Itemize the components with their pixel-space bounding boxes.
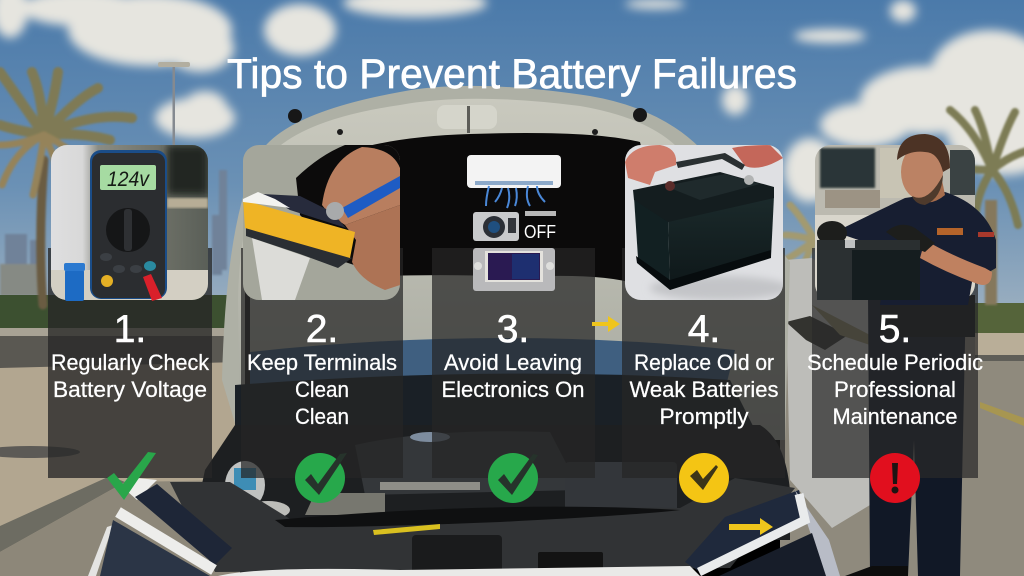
fender and mirror on the right	[785, 258, 870, 528]
dark underside of brush	[246, 226, 352, 268]
panel: step 2 backing	[241, 248, 403, 478]
image: car battery lifted by hands	[625, 145, 790, 300]
display	[100, 165, 156, 190]
gloves	[817, 221, 935, 252]
step 1 text	[51, 308, 210, 402]
blue filter canister	[64, 263, 85, 301]
step 5 text: Maintenance	[832, 404, 958, 429]
rotary dial	[106, 208, 150, 252]
step 5 text	[807, 308, 983, 429]
blue handle	[342, 176, 400, 218]
step 4 text: 4.	[688, 308, 720, 351]
image tile blurred background	[815, 145, 975, 300]
handle	[676, 153, 745, 170]
street lamp	[158, 62, 190, 148]
front bumper and cowl	[170, 478, 795, 576]
battery left face	[634, 197, 670, 287]
forearm	[920, 240, 992, 285]
step 1 text: Battery Voltage	[53, 377, 207, 402]
meter buttons	[100, 253, 156, 287]
red probe	[143, 274, 162, 301]
icon: yellow check badge for step 4	[679, 453, 729, 503]
brush top	[262, 194, 346, 228]
hand	[322, 147, 400, 225]
left headlight	[88, 478, 232, 576]
step 2 text: 2.	[306, 308, 338, 351]
step 3 text: 3.	[497, 308, 529, 351]
hands	[625, 145, 676, 185]
step 5 text: 5.	[879, 308, 911, 351]
torso	[835, 192, 996, 305]
icon group: electronics off	[467, 155, 561, 291]
icon: red warning badge for step 5	[870, 453, 920, 503]
step 2 text: Keep Terminals	[247, 350, 397, 375]
step 1 text: 1.	[114, 308, 146, 351]
step 4 text: Promptly	[660, 404, 748, 429]
ground left and right	[0, 295, 1024, 576]
camera	[473, 212, 519, 241]
battery	[817, 243, 920, 300]
step 4 text: Weak Batteries	[630, 377, 778, 402]
logo badge	[937, 228, 963, 235]
panel: step 3 backing	[432, 248, 595, 478]
step 2 text	[247, 308, 397, 429]
step 1 text: Regularly Check	[51, 350, 210, 375]
icon: green check badge for step 2	[295, 453, 347, 503]
distant skyline	[0, 170, 227, 296]
yellow bristles	[243, 200, 355, 258]
battery base	[636, 250, 771, 290]
arrow: yellow arrow between steps 3 and 4	[592, 316, 620, 332]
sky with clouds	[0, 0, 1024, 340]
palm trees right	[785, 110, 1024, 305]
step 3 text	[442, 308, 584, 402]
right headlight	[685, 490, 840, 576]
step 4 text	[630, 308, 778, 429]
windshield and engine bay	[190, 338, 790, 540]
mechanic's trousers and shirt hem	[845, 295, 975, 576]
OFF label: OFF	[524, 222, 556, 242]
step 2 text: Clean	[295, 404, 349, 429]
display reading: 124v	[107, 168, 150, 191]
step 3 text: Avoid Leaving	[444, 350, 582, 375]
air conditioner	[467, 155, 561, 208]
panel: step 5 backing	[812, 248, 978, 478]
small bar above OFF	[525, 211, 556, 216]
panel: step 1 backing	[48, 248, 212, 478]
step 2 text: Clean	[295, 377, 349, 402]
battery lid	[633, 172, 774, 222]
step 3 text: Electronics On	[442, 377, 584, 402]
arrow: yellow arrow on headlight	[729, 518, 773, 535]
image: cleaning brush on terminal	[243, 145, 400, 300]
car radio	[473, 248, 555, 291]
terminals	[665, 181, 675, 191]
icon: plain green check for step 1	[107, 452, 156, 500]
title: Tips to Prevent Battery Failures	[227, 50, 797, 97]
image: digital multimeter	[51, 145, 208, 301]
battery right face	[668, 196, 774, 287]
step 4 text: Replace Old or	[634, 350, 774, 375]
open hood	[222, 86, 790, 440]
panel: step 4 backing	[622, 248, 785, 478]
mechanic holding battery	[815, 134, 996, 305]
icon: green check badge for step 3	[488, 453, 538, 503]
neck and head	[908, 170, 945, 202]
step 5 text: Schedule Periodic	[807, 350, 983, 375]
palm tree left	[0, 72, 132, 305]
meter body	[90, 150, 167, 299]
step 5 text: Professional	[834, 377, 956, 402]
